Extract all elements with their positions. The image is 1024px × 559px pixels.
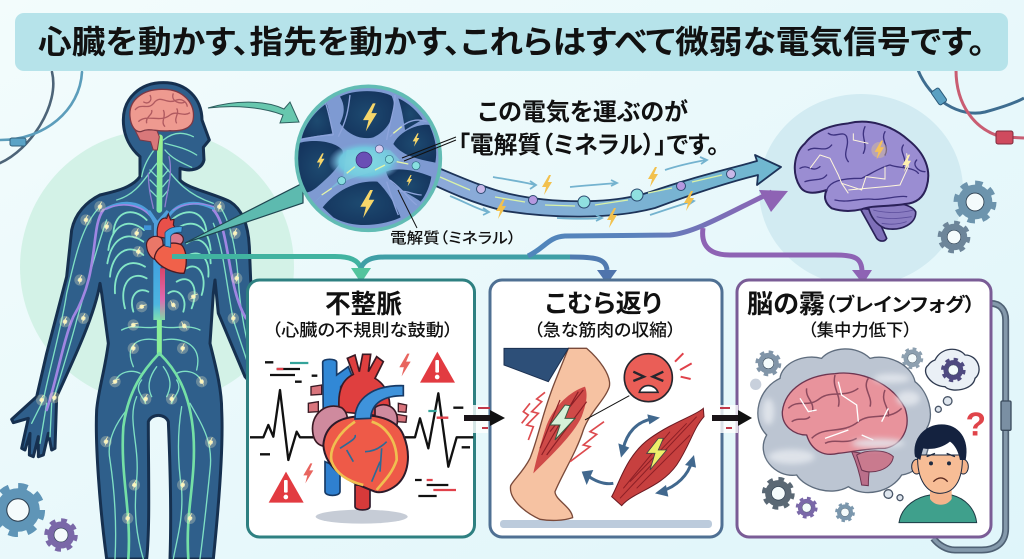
glitch dashes	[260, 362, 470, 496]
fog wisps	[762, 374, 920, 464]
arm nerves	[32, 207, 250, 443]
small yellow bolts	[496, 167, 694, 228]
axon inner flow	[440, 175, 722, 206]
leg cramp illustration	[500, 348, 712, 528]
leader to face	[585, 396, 629, 420]
aorta	[157, 214, 177, 240]
dendrite branches	[300, 95, 427, 215]
calf muscle	[533, 387, 587, 473]
panel: arrhythmia	[248, 280, 474, 537]
current arrows	[450, 157, 707, 221]
red bolts	[303, 354, 411, 483]
flow arrow: cramp to brain fog	[712, 405, 752, 433]
pain zigzags	[522, 392, 604, 462]
glow circle behind body	[20, 130, 294, 404]
neuron nucleus and ions	[356, 152, 372, 168]
ecg line	[250, 390, 473, 467]
small bubbles	[750, 379, 761, 390]
panel: leg cramp	[490, 280, 722, 537]
glow circle behind brain	[759, 94, 963, 286]
central glow	[328, 142, 402, 182]
label: electrolyte: 電解質（ミネラル）	[390, 229, 516, 247]
dark cells	[297, 91, 436, 225]
panel: brain fog	[737, 280, 991, 537]
neuron bolts	[317, 103, 419, 218]
abdominal nerves	[32, 207, 250, 559]
question mark: ?	[966, 407, 986, 444]
muscle bundle	[612, 408, 704, 506]
pulmonary vessel	[165, 227, 182, 247]
person	[899, 424, 977, 523]
atria	[169, 233, 183, 245]
ventricle	[154, 243, 186, 273]
vessels	[355, 485, 370, 510]
thought bubble	[926, 349, 979, 390]
warning triangle bottom	[269, 472, 304, 503]
axon arrow	[410, 155, 781, 228]
subheading: brain fog: （集中力低下）	[808, 321, 912, 340]
ventricle	[323, 416, 408, 492]
rib nerves	[107, 212, 211, 312]
vertical vessels	[144, 210, 169, 320]
brain stem	[860, 208, 887, 241]
title banner: 心臓を動かす、指先を動かす、これらはすべて微弱な電気信号です。	[38, 24, 985, 60]
subheading: arrhythmia: （心臓の不規則な鼓動）	[272, 321, 453, 340]
heart illustration	[250, 352, 473, 524]
white current lines	[810, 133, 908, 193]
cerebrum	[795, 122, 928, 211]
calf bolt	[550, 405, 575, 440]
subheading: leg cramp: （急な筋肉の収縮）	[534, 321, 676, 340]
leader lines	[398, 137, 456, 228]
fog brain	[852, 452, 873, 486]
leg nerves	[109, 397, 211, 559]
floor	[500, 520, 712, 528]
heading: brain fog: 脳の霧	[747, 289, 825, 319]
title banner	[15, 13, 1008, 71]
sulci	[800, 127, 925, 201]
flow arrow: arrhythmia to cramp	[464, 405, 505, 433]
lead text: 「電解質（ミネラル）」です。	[458, 132, 719, 159]
brain in head	[130, 89, 193, 150]
heading: brain fog: （ブレインフォグ）	[825, 293, 975, 316]
major nerve trunks	[47, 137, 246, 559]
lead text	[458, 98, 719, 159]
large purple brain	[795, 122, 928, 241]
cables top left	[0, 72, 82, 163]
small round bubbles	[884, 397, 952, 501]
nerve sparks	[36, 201, 242, 524]
atria	[312, 406, 347, 446]
gear cluster bottom left	[0, 488, 75, 549]
gears	[758, 353, 779, 374]
arrow: to brain via blue and purple	[528, 190, 872, 284]
coronary vessels	[331, 422, 397, 490]
brain fog illustration	[750, 349, 986, 523]
head and shoulder nerves	[117, 133, 213, 203]
warning triangle top	[420, 352, 455, 383]
electrolyte particles	[476, 170, 736, 208]
human body with nerves	[12, 83, 270, 559]
neuron flow arrows	[322, 127, 408, 195]
heading: arrhythmia: 不整脈	[325, 289, 402, 319]
gears right of brain	[940, 184, 993, 251]
shorts	[504, 348, 568, 382]
shadow	[316, 510, 408, 524]
cerebellum	[868, 203, 916, 229]
pain face	[624, 353, 692, 402]
arrow: brain to neuron	[208, 102, 299, 123]
cables top right	[918, 70, 1024, 144]
heading: leg cramp: こむら返り	[545, 290, 662, 318]
chest vessels and heart	[144, 210, 186, 320]
heading: brain fog	[747, 289, 975, 319]
lead text: この電気を運ぶのが	[478, 98, 688, 126]
brain glow bolt	[871, 142, 887, 158]
pulmonary artery	[355, 386, 403, 419]
neuron close-up circle	[296, 86, 441, 231]
fog cloud	[758, 349, 930, 493]
body silhouette	[12, 83, 270, 559]
cable around brain fog panel	[933, 303, 1011, 550]
wedge: heart to neuron zoom	[185, 183, 303, 243]
leg	[510, 348, 610, 520]
blue cycle arrows	[587, 419, 692, 491]
heart connector line	[172, 256, 617, 284]
